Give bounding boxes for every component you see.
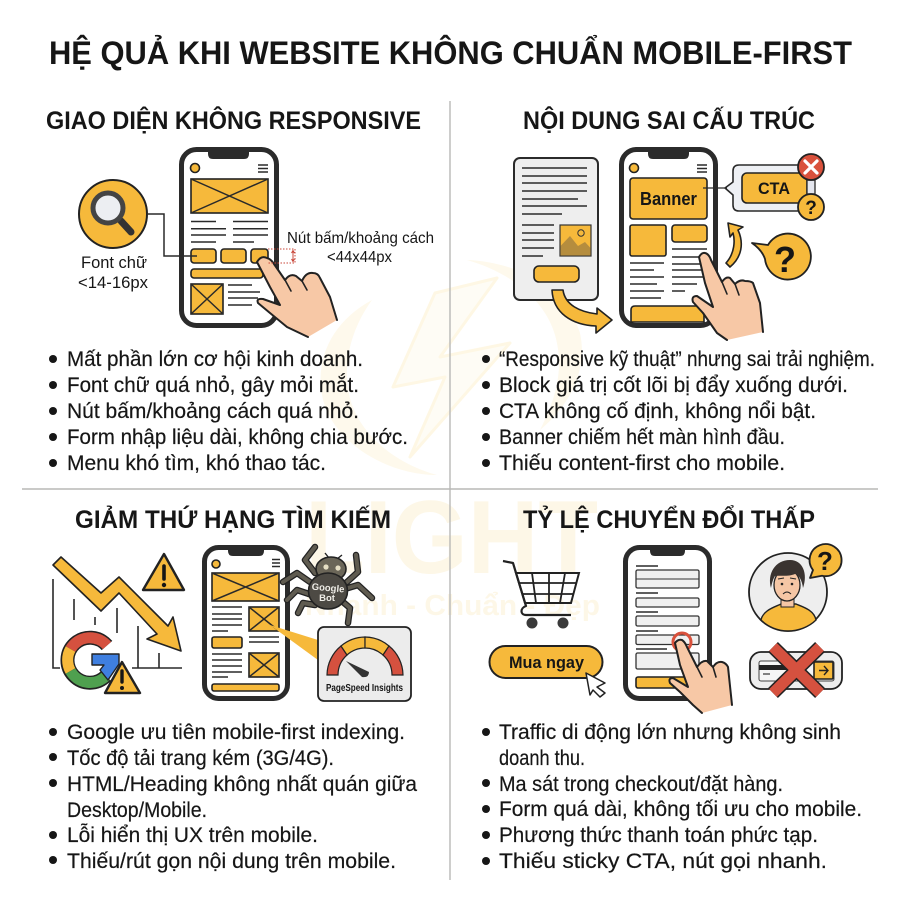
bullet list: Desktop/Mobile. xyxy=(67,799,207,822)
label: font size: <14-16px xyxy=(78,274,149,292)
icon: phone with long form xyxy=(626,548,710,698)
bullet list: Thiếu sticky CTA, nút gọi nhanh. xyxy=(499,850,827,873)
watermark: Light logo: LIGHT xyxy=(305,480,598,596)
bullet list: Thiếu content-first cho mobile. xyxy=(499,452,785,475)
bullet list xyxy=(49,348,408,475)
red dotted touch target xyxy=(268,249,295,263)
icon: question speech bubble xyxy=(752,234,811,280)
icon: Googlebot spider: Google xyxy=(311,582,345,595)
callout: CTA bubble: CTA xyxy=(758,179,790,198)
heading: nội dung: NỘI DUNG SAI CẤU TRÚC xyxy=(523,105,815,135)
callout: CTA bubble: ? xyxy=(805,198,817,219)
bullet list: Block giá trị cốt lõi bị đẩy xuống dưới. xyxy=(499,374,848,397)
button: Mua ngay xyxy=(490,646,602,678)
bullet list: Ma sát trong checkout/đặt hàng. xyxy=(499,773,783,796)
bullet list xyxy=(482,348,875,475)
icon: crossed payment card xyxy=(750,647,842,693)
callout: CTA bubble xyxy=(703,154,824,220)
watermark: Light logo: Nhanh - Chuẩn - Đẹp xyxy=(305,590,600,622)
arrow: document to phone xyxy=(552,290,612,333)
icon: Googlebot spider: Bot xyxy=(319,593,336,604)
arrow: falling trend xyxy=(53,557,181,651)
icon: phone wireframe xyxy=(204,548,288,698)
icon: warning triangle on G xyxy=(105,662,140,693)
icon: warning triangle xyxy=(143,554,184,590)
bullet list: doanh thu. xyxy=(499,747,585,770)
bullet list: Thiếu/rút gọn nội dung trên mobile. xyxy=(67,850,396,873)
bullet list: Phương thức thanh toán phức tạp. xyxy=(499,824,818,847)
icon: question bubble xyxy=(810,544,842,578)
icon: question bubble: ? xyxy=(817,546,833,576)
bullet list: Form nhập liệu dài, không chia bước. xyxy=(67,426,408,449)
bullet list: Banner chiếm hết màn hình đầu. xyxy=(499,426,785,449)
bullet list: CTA không cố định, không nổi bật. xyxy=(499,400,816,423)
label: font size: Font chữ xyxy=(81,254,147,272)
icon: pointing hand xyxy=(692,253,763,340)
watermark: Light logo xyxy=(305,260,600,622)
arrow: curved up xyxy=(726,223,743,267)
icon: Googlebot spider xyxy=(283,547,372,623)
bullet list: Tốc độ tải trang kém (3G/4G). xyxy=(67,747,334,770)
bullet list xyxy=(482,721,862,873)
panel: nội dung sai cấu trúc xyxy=(482,105,875,475)
panel: giảm thứ hạng tìm kiếm xyxy=(49,504,417,873)
bullet list xyxy=(49,721,417,873)
chart: falling bars xyxy=(53,579,182,668)
icon: worried user avatar xyxy=(749,553,827,631)
label: button size: <44x44px xyxy=(327,249,392,266)
connector line xyxy=(147,214,197,256)
bullet list: Google ưu tiên mobile-first indexing. xyxy=(67,721,405,744)
label: button size xyxy=(287,230,434,266)
bullet list: Lỗi hiển thị UX trên mobile. xyxy=(67,824,318,847)
bullet list: Nút bấm/khoảng cách quá nhỏ. xyxy=(67,400,359,423)
heading: giao diện: GIAO DIỆN KHÔNG RESPONSIVE xyxy=(46,105,421,135)
icon: shopping cart xyxy=(503,561,579,628)
heading: tỷ lệ chuyển đổi: TỶ LỆ CHUYỂN ĐỔI THẤP xyxy=(523,504,815,534)
bullet list: Font chữ quá nhỏ, gây mỏi mắt. xyxy=(67,374,359,397)
icon: PageSpeed card: PageSpeed Insights xyxy=(326,682,403,694)
heading: giảm thứ hạng: GIẢM THỨ HẠNG TÌM KIẾM xyxy=(75,504,391,534)
bullet list: Form quá dài, không tối ưu cho mobile. xyxy=(499,798,862,821)
bullet list: Menu khó tìm, khó thao tác. xyxy=(67,452,326,475)
bullet list: Mất phần lớn cơ hội kinh doanh. xyxy=(67,348,363,371)
icon: PageSpeed card xyxy=(318,627,411,701)
panel: tỷ lệ chuyển đổi thấp xyxy=(482,504,862,873)
icon: phone wireframe xyxy=(182,150,276,326)
label: font size xyxy=(78,254,149,292)
icon: pointing hand xyxy=(257,257,337,337)
label: button size: Nút bấm/khoảng cách xyxy=(287,230,434,247)
icon: phone with banner: Banner xyxy=(640,189,697,209)
icon: cursor xyxy=(586,673,605,697)
icon: pointing hand xyxy=(669,640,732,713)
icon: question speech bubble: ? xyxy=(774,239,796,280)
icon: phone with banner xyxy=(622,150,716,326)
title: HỆ QUẢ KHI WEBSITE KHÔNG CHUẨN MOBILE-FIRST xyxy=(49,35,852,71)
icon: desktop document xyxy=(514,158,598,300)
panel: giao diện không responsive xyxy=(46,105,434,475)
icon: Google G xyxy=(62,632,119,688)
callout beam xyxy=(270,625,318,660)
icon: magnifier badge xyxy=(79,180,147,248)
button: Mua ngay: Mua ngay xyxy=(509,653,585,672)
bullet list: HTML/Heading không nhất quán giữa xyxy=(67,773,417,796)
bullet list: Traffic di động lớn nhưng không sinh xyxy=(499,721,841,744)
